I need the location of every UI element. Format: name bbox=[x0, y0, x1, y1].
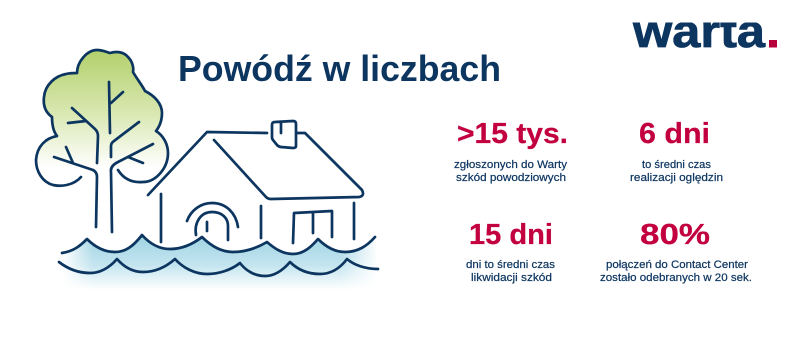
stat: 6 dni: to średni czas bbox=[642, 159, 711, 171]
tree crown bbox=[36, 50, 168, 186]
stat: 15 dni bbox=[466, 219, 556, 284]
illustration: flooded house and tree bbox=[36, 50, 378, 292]
stat: 80%: połączeń do Contact Center bbox=[606, 259, 748, 271]
stat: 15 dni: 15 dni bbox=[469, 219, 553, 251]
tree bbox=[36, 50, 168, 232]
stat: >15 tys. bbox=[454, 118, 568, 184]
stat: 15 dni: likwidacji szkód bbox=[471, 272, 552, 284]
chimney bbox=[272, 121, 296, 148]
stat: 80%: zostało odebranych w 20 sek. bbox=[600, 272, 752, 284]
stat: 6 dni bbox=[630, 118, 723, 184]
waves bbox=[59, 235, 378, 276]
window bbox=[293, 211, 332, 243]
stat: >15 tys.: szkód powodziowych bbox=[456, 172, 566, 184]
stat: 6 dni: 6 dni bbox=[639, 118, 710, 150]
tree trunk and branches bbox=[54, 82, 153, 232]
house bbox=[148, 121, 363, 243]
stat: 80% bbox=[600, 219, 752, 284]
walls bbox=[161, 194, 354, 242]
title: Powódź w liczbach bbox=[178, 48, 501, 89]
water fill bbox=[66, 238, 374, 286]
stat: 80%: 80% bbox=[640, 219, 710, 251]
stat: >15 tys.: >15 tys. bbox=[457, 118, 568, 150]
stat: 6 dni: realizacji oględzin bbox=[630, 172, 723, 184]
stat: 15 dni: dni to średni czas bbox=[466, 259, 556, 271]
logo: warta bbox=[632, 22, 777, 48]
arched door bbox=[187, 203, 238, 240]
roof bbox=[148, 132, 363, 199]
stat: >15 tys.: zgłoszonych do Warty bbox=[454, 159, 568, 171]
logo: warta: warta bbox=[632, 5, 765, 57]
